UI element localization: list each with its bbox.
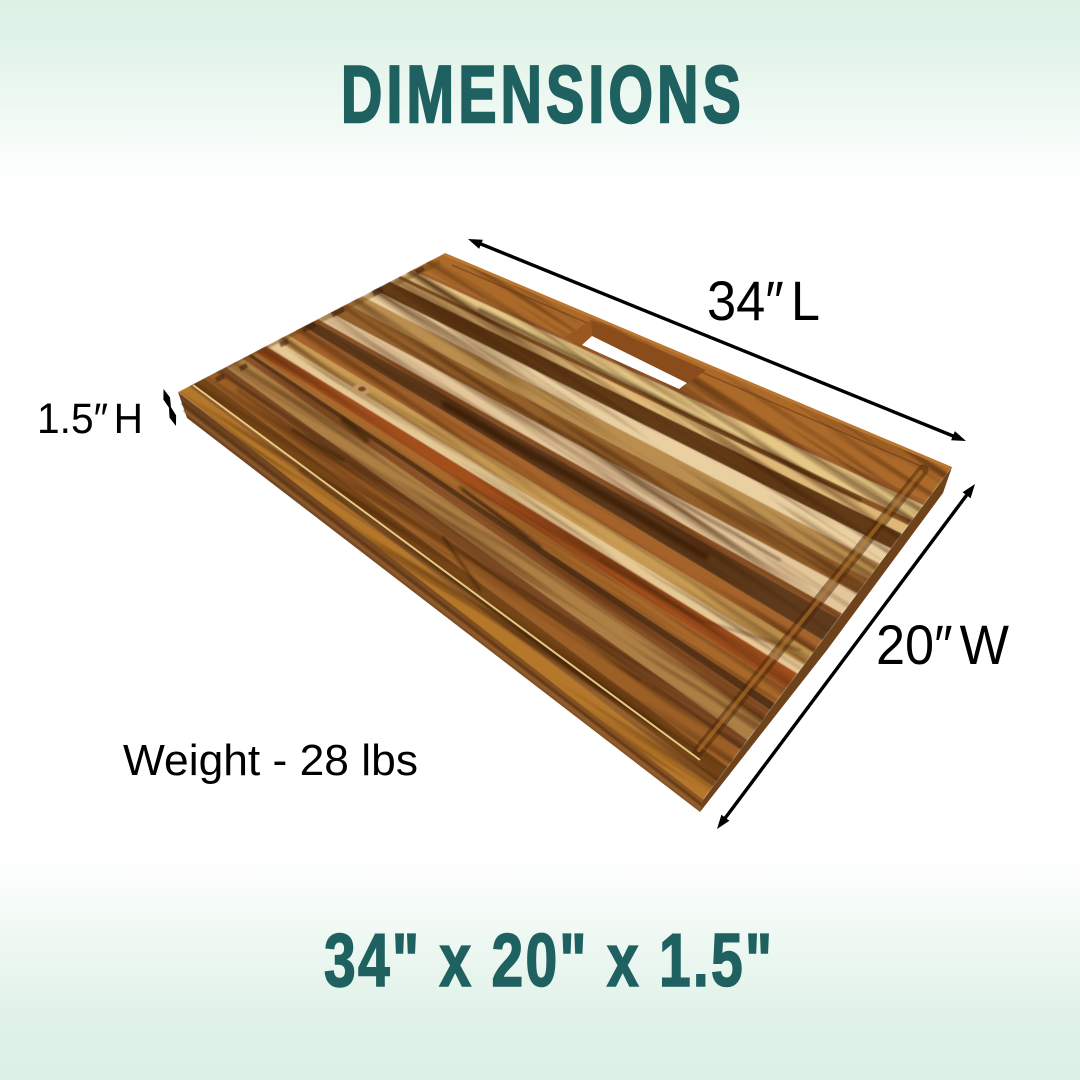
arrow: 1.5 inch height bbox=[163, 389, 176, 426]
wood grain texture bbox=[178, 257, 948, 792]
bottom dimensions summary: 34" x 20" x 1.5" bbox=[324, 920, 774, 1003]
arrow: 20 inch width bbox=[717, 484, 975, 829]
label: 1.5 inch height: 1.5″ H bbox=[37, 395, 143, 443]
back rim edge bbox=[445, 254, 952, 468]
label: weight: Weight - 28 lbs bbox=[123, 736, 418, 785]
label: 20 inch width: 20″ W bbox=[876, 613, 1009, 676]
slot far wall bbox=[591, 320, 706, 384]
slot opening bbox=[582, 336, 687, 389]
knot bbox=[353, 383, 371, 395]
board top face stripes bbox=[178, 253, 952, 800]
juice groove: left end bbox=[195, 262, 440, 381]
juice groove: back bbox=[452, 265, 923, 467]
side face streaks bbox=[183, 404, 702, 808]
juice groove: front cream line bbox=[193, 385, 700, 760]
slot left wall bbox=[565, 320, 592, 345]
label: 34 inch length: 34″ L bbox=[707, 269, 820, 332]
dark grain streaks bbox=[238, 310, 860, 730]
groove end marks bbox=[216, 268, 424, 380]
background: top mint gradient bbox=[0, 0, 1080, 180]
juice groove: right channel bbox=[697, 470, 923, 753]
arrow: 34 inch length bbox=[468, 239, 966, 441]
title: DIMENSIONS bbox=[341, 49, 745, 139]
board front side face bbox=[178, 392, 704, 812]
cutting board bbox=[178, 253, 952, 812]
handle slot bbox=[565, 320, 706, 389]
board right side face bbox=[700, 467, 952, 812]
background: bottom mint gradient bbox=[0, 860, 1080, 1080]
